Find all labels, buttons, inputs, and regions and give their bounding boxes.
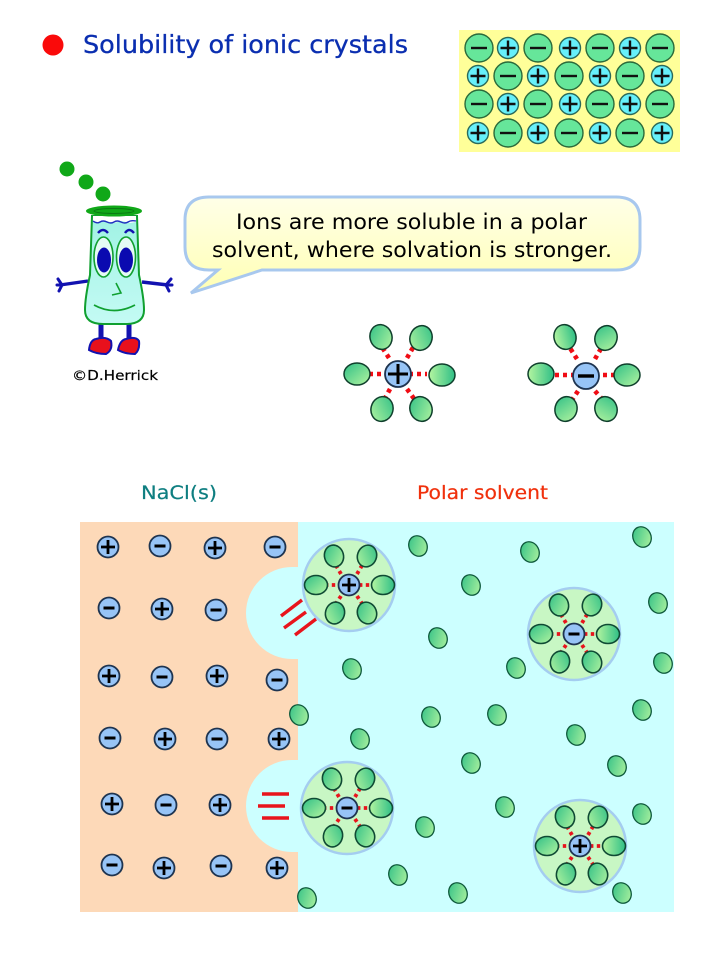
speech bubble: Ions are more soluble in a polar xyxy=(236,210,587,234)
speech bubble xyxy=(185,197,640,293)
solvated anion diagram xyxy=(528,322,640,425)
credit: ©D.Herrick xyxy=(72,369,159,384)
attraction lines: diagonal xyxy=(281,600,316,635)
bullet: red dot xyxy=(42,34,64,56)
panel: polar solvent with notches in crystal xyxy=(246,522,674,912)
solvated cation diagram xyxy=(344,322,455,425)
title: Solubility of ionic crystals xyxy=(83,30,408,59)
solvated cation 2 xyxy=(534,800,626,892)
solvated cation 1 xyxy=(303,539,395,631)
ionic crystal lattice xyxy=(459,30,680,152)
free solvent molecules xyxy=(286,524,676,911)
heading: Polar solvent: Polar solvent xyxy=(417,482,548,504)
panel: NaCl solid xyxy=(80,522,298,912)
crystal lattice ions xyxy=(98,536,290,878)
solvated anion 2 xyxy=(301,762,393,854)
solvated anion 1 xyxy=(528,588,620,680)
heading: NaCl(s): NaCl(s) xyxy=(141,482,217,504)
mascot: flask character xyxy=(57,162,172,354)
speech bubble: solvent, where solvation is stronger. xyxy=(212,238,612,262)
attraction lines: horizontal xyxy=(258,794,289,818)
